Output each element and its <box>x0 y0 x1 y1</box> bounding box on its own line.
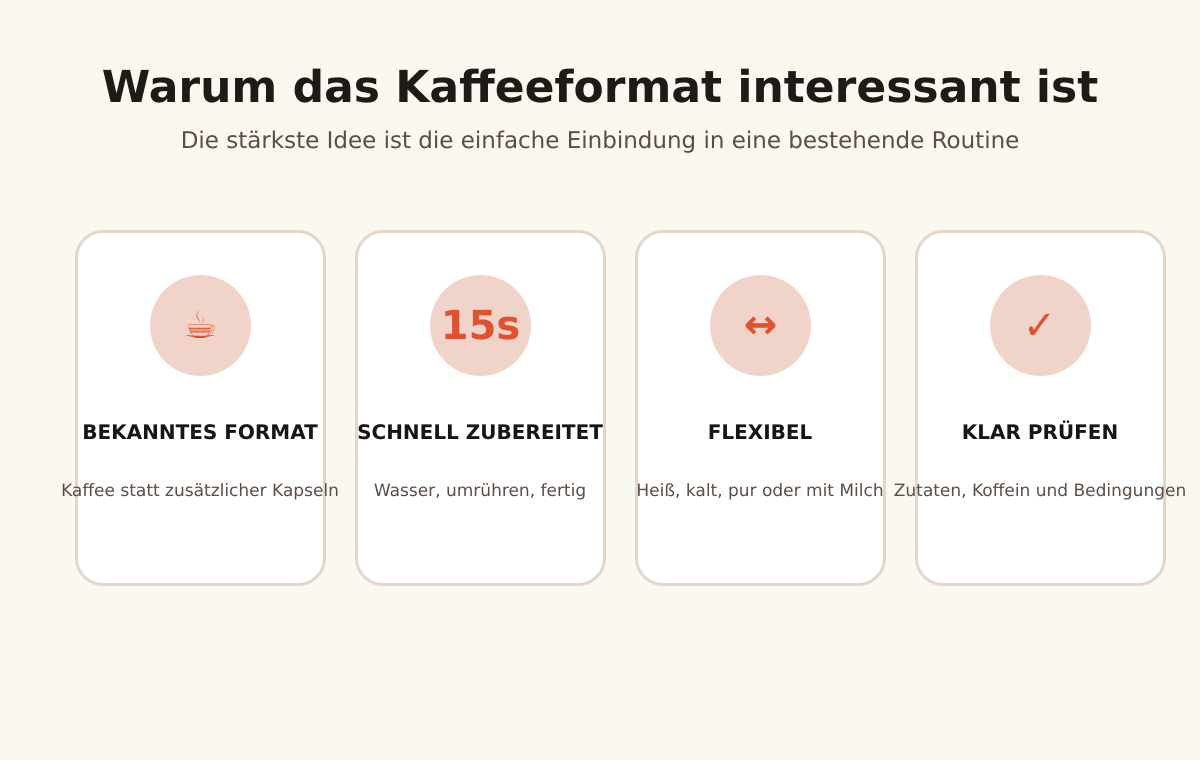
title: Warum das Kaffeeformat interessant ist <box>102 62 1098 113</box>
panel: bekanntes format <box>75 230 326 586</box>
icon: 15s: 15s <box>441 303 520 349</box>
icon: 15s <box>430 275 531 376</box>
text: klar prüfen: Zutaten, Koffein und Bedingungen <box>894 481 1186 501</box>
panel: flexibel <box>635 230 886 586</box>
text: bekanntes format: Kaffee statt zusätzlicher Kapseln <box>61 481 339 501</box>
heading: flexibel: FLEXIBEL <box>708 420 812 444</box>
text: schnell zubereitet: Wasser, umrühren, fertig <box>374 481 586 501</box>
text: flexibel: Heiß, kalt, pur oder mit Milch <box>636 481 884 501</box>
icon: double arrow <box>710 275 811 376</box>
icon: check mark: ✓ <box>1023 303 1056 349</box>
icon: coffee cup <box>150 275 251 376</box>
heading: schnell zubereitet: SCHNELL ZUBEREITET <box>357 420 603 444</box>
heading: klar prüfen: KLAR PRÜFEN <box>962 420 1118 444</box>
icon: check mark <box>990 275 1091 376</box>
icon: double arrow: ↔ <box>744 302 777 348</box>
heading: bekanntes format: BEKANNTES FORMAT <box>82 420 318 444</box>
icon: coffee cup: ☕ <box>183 303 218 347</box>
panel: schnell zubereitet <box>355 230 606 586</box>
subtitle: Die stärkste Idee ist die einfache Einbindung in eine bestehende Routine <box>181 128 1019 154</box>
panel: klar prüfen <box>915 230 1166 586</box>
